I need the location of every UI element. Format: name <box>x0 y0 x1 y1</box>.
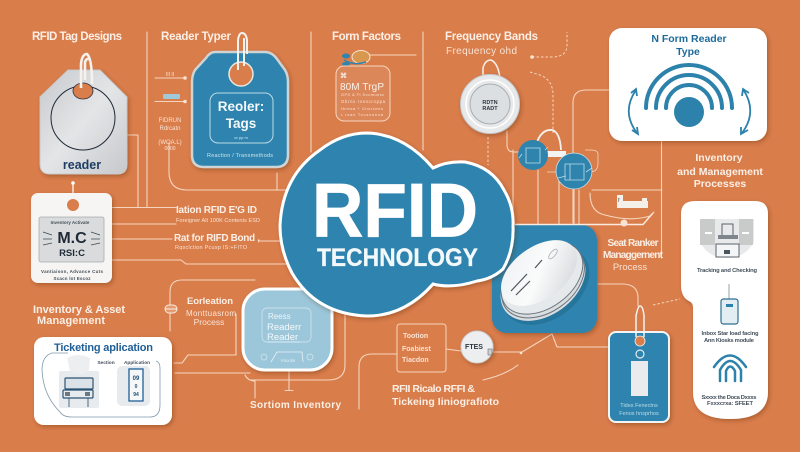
icon: silver RFID tag <box>40 54 127 174</box>
panel: form factors card <box>336 66 390 121</box>
text: bottom caption <box>702 395 756 407</box>
panel: white tag with M.C display: Inventory Activate <box>51 220 90 225</box>
panel: top right form reader type card: Type <box>676 46 700 58</box>
panel: ticketing application card <box>34 337 172 425</box>
panel: light blue reader card: Readerr <box>267 322 301 333</box>
label: Iation RFID: Iation RFID E'G ID <box>176 205 257 216</box>
subtitle: TECHNOLOGY: TECHNOLOGY <box>317 244 478 272</box>
icon: silver RFID tag: reader <box>63 158 101 172</box>
text: Seat Ranker Management Process <box>603 238 664 273</box>
panel: blue Reader Tags tag: Tags <box>226 116 256 131</box>
box: Tootion list: Tiacdon <box>402 357 429 364</box>
panel: blue Reader Tags tag: Reaction / Transmethods <box>207 153 273 159</box>
panel: white tag with M.C display: Vantiaison, Advance Cuts <box>41 269 103 274</box>
panel: ticketing application card: Ticketing aplication <box>54 342 153 354</box>
text: Eorleation Process <box>186 296 236 327</box>
heading: Inventory & Asset Management <box>33 304 125 327</box>
heading: Inventory & Asset Management: Inventory & Asset <box>33 304 125 316</box>
main title cloud <box>280 133 513 316</box>
label: Iation RFID <box>176 205 260 224</box>
icon: white puck reader <box>486 227 604 341</box>
panel: blue hanging tag: Tides Fenectns <box>620 403 658 409</box>
panel: form factors card: Obrnx Iosncroppa <box>341 99 386 104</box>
text: device caption: Ann Kiosks module <box>704 338 755 344</box>
connector lines <box>112 32 680 409</box>
icon: paired blue reader discs <box>518 130 598 189</box>
small labels beside tag panel: Rdrcatn <box>159 126 181 132</box>
panel: ticketing application card: Application <box>124 360 150 366</box>
panel: light blue reader card: Vsocks <box>281 358 296 363</box>
text: Eorleation Process: Monttuasrom <box>186 309 236 318</box>
icon: ticket scanner: 09 <box>133 376 140 382</box>
panel: form factors card: 80M TrgP <box>340 82 384 93</box>
icon: ticket scanner <box>117 366 150 406</box>
label: RFID Ticketing Infographic: RFII Ricalo RFFI & <box>392 383 475 395</box>
box: Tootion list: Foabiest <box>402 346 431 353</box>
heading: Inventory & Asset Management: Management <box>37 315 105 327</box>
panel: top right form reader type card <box>609 28 767 141</box>
heading: Inventory and Management Processes <box>677 152 763 190</box>
heading: Form Factors: Form Factors <box>332 31 401 43</box>
heading: Frequency Bands: Frequency Bands <box>445 31 538 43</box>
panel: blue hanging tag: Fenos hnsprhos <box>619 411 659 417</box>
panel: blue hanging tag <box>609 306 669 422</box>
icon: frequency button tag: RDTN <box>482 100 498 106</box>
text: Seat Ranker Management Process: Process <box>613 262 647 273</box>
text: Eorleation Process: Process <box>194 317 224 327</box>
panel: form factors card: GPS & Ft Dcomunsc <box>341 93 384 97</box>
icon: small label block: I' <box>618 198 620 204</box>
text: bottom caption: Sxxxx the Doca Dxxxs <box>702 395 756 401</box>
panel: blue device panel <box>492 225 597 333</box>
label: RFID Ticketing Infographic: Tickeing Iiniografioto <box>392 396 499 408</box>
icon: small RFID button <box>461 331 493 363</box>
panel: blue Reader Tags tag <box>192 33 288 167</box>
icon: ticketing gate <box>59 355 99 408</box>
panel: ticketing application card: Section <box>97 360 115 366</box>
text: Seat Ranker Management Process: Seat Ranker <box>608 238 659 249</box>
panel: white tag with M.C display: Scacn lot Escoz <box>54 276 91 281</box>
icon: ticket scanner: 0 <box>135 384 138 390</box>
icon: small RFID button: FTES <box>465 344 483 351</box>
title: RFID: RFID <box>312 168 478 254</box>
text: device caption <box>702 331 759 344</box>
icon: frequency button tag <box>460 60 520 134</box>
small labels beside tag panel <box>158 72 182 152</box>
icon: small label block <box>617 195 648 208</box>
subheading: Frequency ohd: Frequency ohd <box>446 46 517 57</box>
icon: ticket scanner: 94 <box>133 392 139 398</box>
panel: blue Reader Tags tag: or pp m <box>234 135 248 140</box>
label: Rat for RIFD Bond <box>174 233 260 251</box>
small labels beside tag panel: FIDRUN <box>159 118 181 124</box>
panel: white tag with M.C display <box>31 181 112 283</box>
heading: Inventory and Management Processes: and Management <box>677 166 763 178</box>
label: Rat for RIFD Bond: Rqsclction Pcusp IS:+FITO <box>175 245 248 251</box>
small labels beside tag panel: III II <box>166 72 174 78</box>
line above device panel <box>515 213 653 226</box>
label: RFID Ticketing Infographic <box>392 383 499 408</box>
icon: tracking station <box>700 219 754 258</box>
small labels beside tag panel: (WOA.L) <box>158 140 182 146</box>
label: Iation RFID: Foreigner Alt 100K Contents ESD <box>176 218 260 224</box>
text: tracking and checking: Tracking and Checking <box>697 268 757 274</box>
small labels beside tag panel: 0000 <box>164 146 176 152</box>
panel: form factors card: ⌘ <box>340 72 347 80</box>
text: Seat Ranker Management Process: Managgernent <box>603 250 664 261</box>
heading: Reader Typer: Reader Typer <box>161 31 232 43</box>
panel: right processes column <box>681 201 768 419</box>
icon: reader device <box>721 284 738 324</box>
heading: RFID Tag Designs: RFID Tag Designs <box>32 31 122 43</box>
label: Sortiom Inventory: Sortiom Inventory <box>250 400 341 411</box>
text: bottom caption: Fxxxcrxa: SFEET <box>707 401 753 407</box>
panel: light blue reader card <box>243 289 332 370</box>
text: Eorleation Process: Eorleation <box>187 296 233 307</box>
panel: light blue reader card: Reader <box>267 332 298 343</box>
box: Tootion list <box>397 324 446 372</box>
panel: form factors card: Ibreoa + Cnsrcmrs <box>341 106 383 111</box>
panel: white tag with M.C display: RSI:C <box>59 248 85 259</box>
panel: light blue reader card: Reess <box>268 312 291 321</box>
label: Rat for RIFD Bond: Rat for RIFD Bond , <box>174 233 260 244</box>
pill icon on connector <box>165 305 177 313</box>
icon: rotation arrows <box>629 89 750 134</box>
panel: top right form reader type card: N Form Reader <box>651 33 727 45</box>
panel: white tag with M.C display: M.C <box>57 230 87 247</box>
heading: Inventory and Management Processes: Processes <box>694 178 746 190</box>
icon: frequency button tag: RADT <box>482 106 498 112</box>
icon: fingerprint waves <box>714 356 746 381</box>
panel: form factors card: • roan Tcosoonsa <box>341 112 384 117</box>
panel: blue Reader Tags tag: Reoler: <box>218 99 264 114</box>
heading: Inventory and Management Processes: Inventory <box>695 152 743 164</box>
icon: reader waves <box>646 65 732 127</box>
text: device caption: Inbox Star load facing <box>702 331 759 337</box>
box: Tootion list: Tootion <box>403 333 428 340</box>
icon: form factor key fob <box>342 50 370 66</box>
